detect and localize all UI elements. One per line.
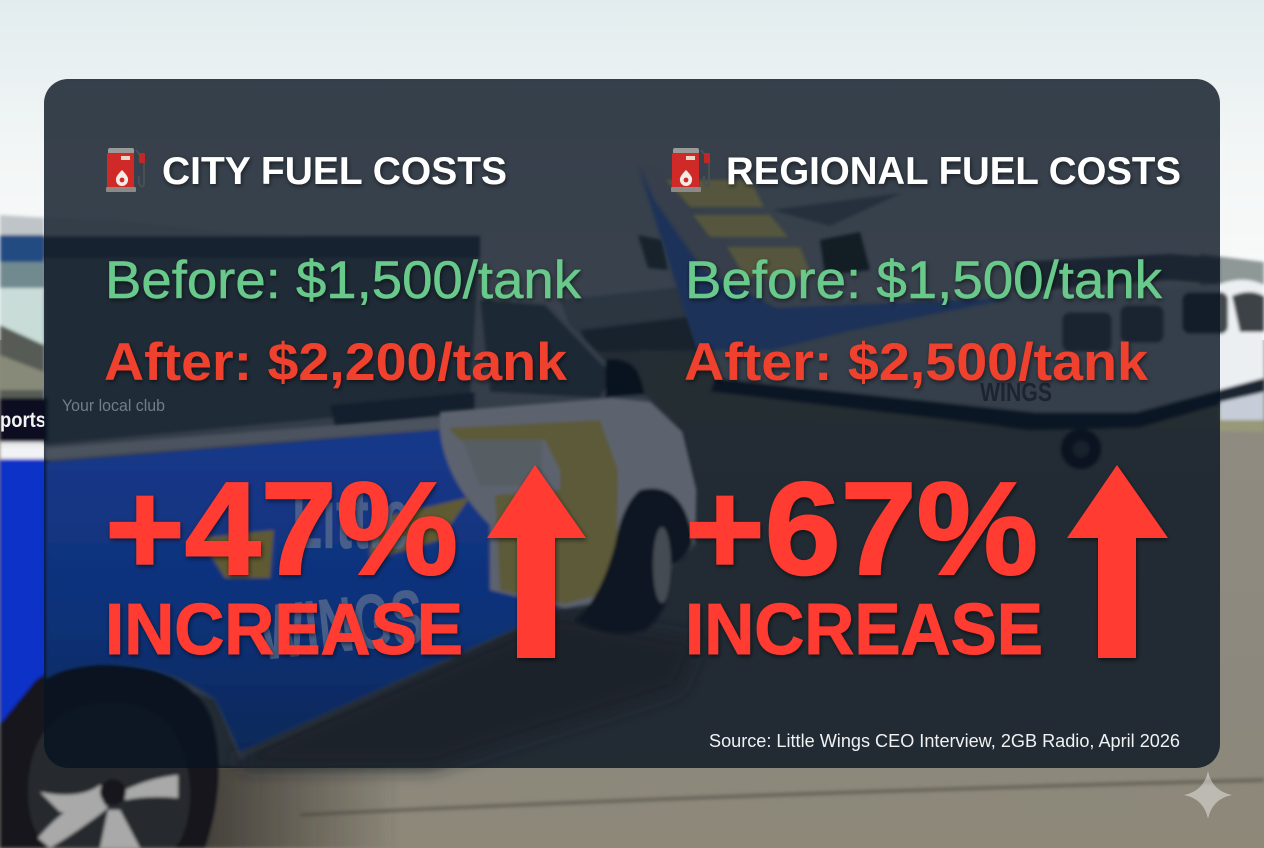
fuselage bbox=[700, 280, 1264, 417]
heading: regional fuel costs: REGIONAL FUEL COSTS bbox=[726, 150, 1181, 193]
label: city increase: INCREASE bbox=[105, 590, 463, 670]
stat: regional +67%: +67% bbox=[685, 455, 1038, 602]
van blue side bbox=[46, 430, 560, 752]
panel: city fuel costs bbox=[104, 148, 586, 670]
trees bbox=[820, 232, 870, 275]
van yellow wrap bbox=[448, 420, 618, 604]
van white front bbox=[440, 398, 696, 608]
wing logo bbox=[200, 497, 470, 578]
text: regional after price: After: $2,500/tank bbox=[684, 333, 1149, 392]
van cabin bbox=[0, 215, 696, 760]
plane tail yellow stripes bbox=[666, 180, 812, 277]
rear rim bbox=[28, 702, 190, 848]
icon: regional fuel pump bbox=[671, 148, 710, 192]
faint van and plane lettering: Little bbox=[292, 471, 410, 567]
source note: Source: Little Wings CEO Interview, 2GB Radio, April 2026 bbox=[709, 731, 1180, 751]
stat: city +47%: +47% bbox=[105, 455, 458, 602]
cockpit window bbox=[1232, 292, 1264, 332]
faint plane wings label: WINGS bbox=[980, 377, 1052, 407]
text: city after price: After: $2,200/tank bbox=[104, 333, 568, 392]
panel: regional fuel costs bbox=[671, 148, 1181, 670]
arrow: city up bbox=[487, 465, 586, 658]
photo colours seen through panel bbox=[46, 165, 1015, 752]
heading: city fuel costs: CITY FUEL COSTS bbox=[162, 150, 507, 193]
olive grass bbox=[640, 350, 1264, 432]
icon: city fuel pump bbox=[106, 148, 145, 192]
distant plane bbox=[560, 285, 700, 352]
distant building bbox=[1200, 254, 1264, 300]
main wheel bbox=[1061, 429, 1101, 469]
faint van and plane lettering bbox=[255, 471, 428, 677]
dark overlay panel bbox=[44, 79, 1220, 768]
tail and tailplane bbox=[638, 165, 780, 350]
wheel arch dark bbox=[0, 662, 219, 848]
front tyre bbox=[575, 488, 692, 633]
background photo: van and plane on airfield: ports bbox=[0, 409, 46, 432]
concrete crack bbox=[300, 780, 1264, 815]
left strip of van bbox=[0, 215, 44, 236]
text: regional before price: Before: $1,500/tank bbox=[685, 251, 1163, 310]
arrow: regional up bbox=[1067, 465, 1168, 658]
van shadow on tarmac bbox=[240, 612, 700, 768]
plane tail blue bbox=[638, 165, 1015, 350]
text: city before price: Before: $1,500/tank bbox=[105, 251, 582, 310]
label: regional increase: INCREASE bbox=[685, 590, 1043, 670]
faint club slogan: Your local club bbox=[62, 396, 165, 415]
belly and wing bbox=[710, 378, 1264, 430]
faint van and plane lettering: WINGS bbox=[255, 572, 428, 677]
icon: sparkle watermark bbox=[1184, 771, 1232, 819]
